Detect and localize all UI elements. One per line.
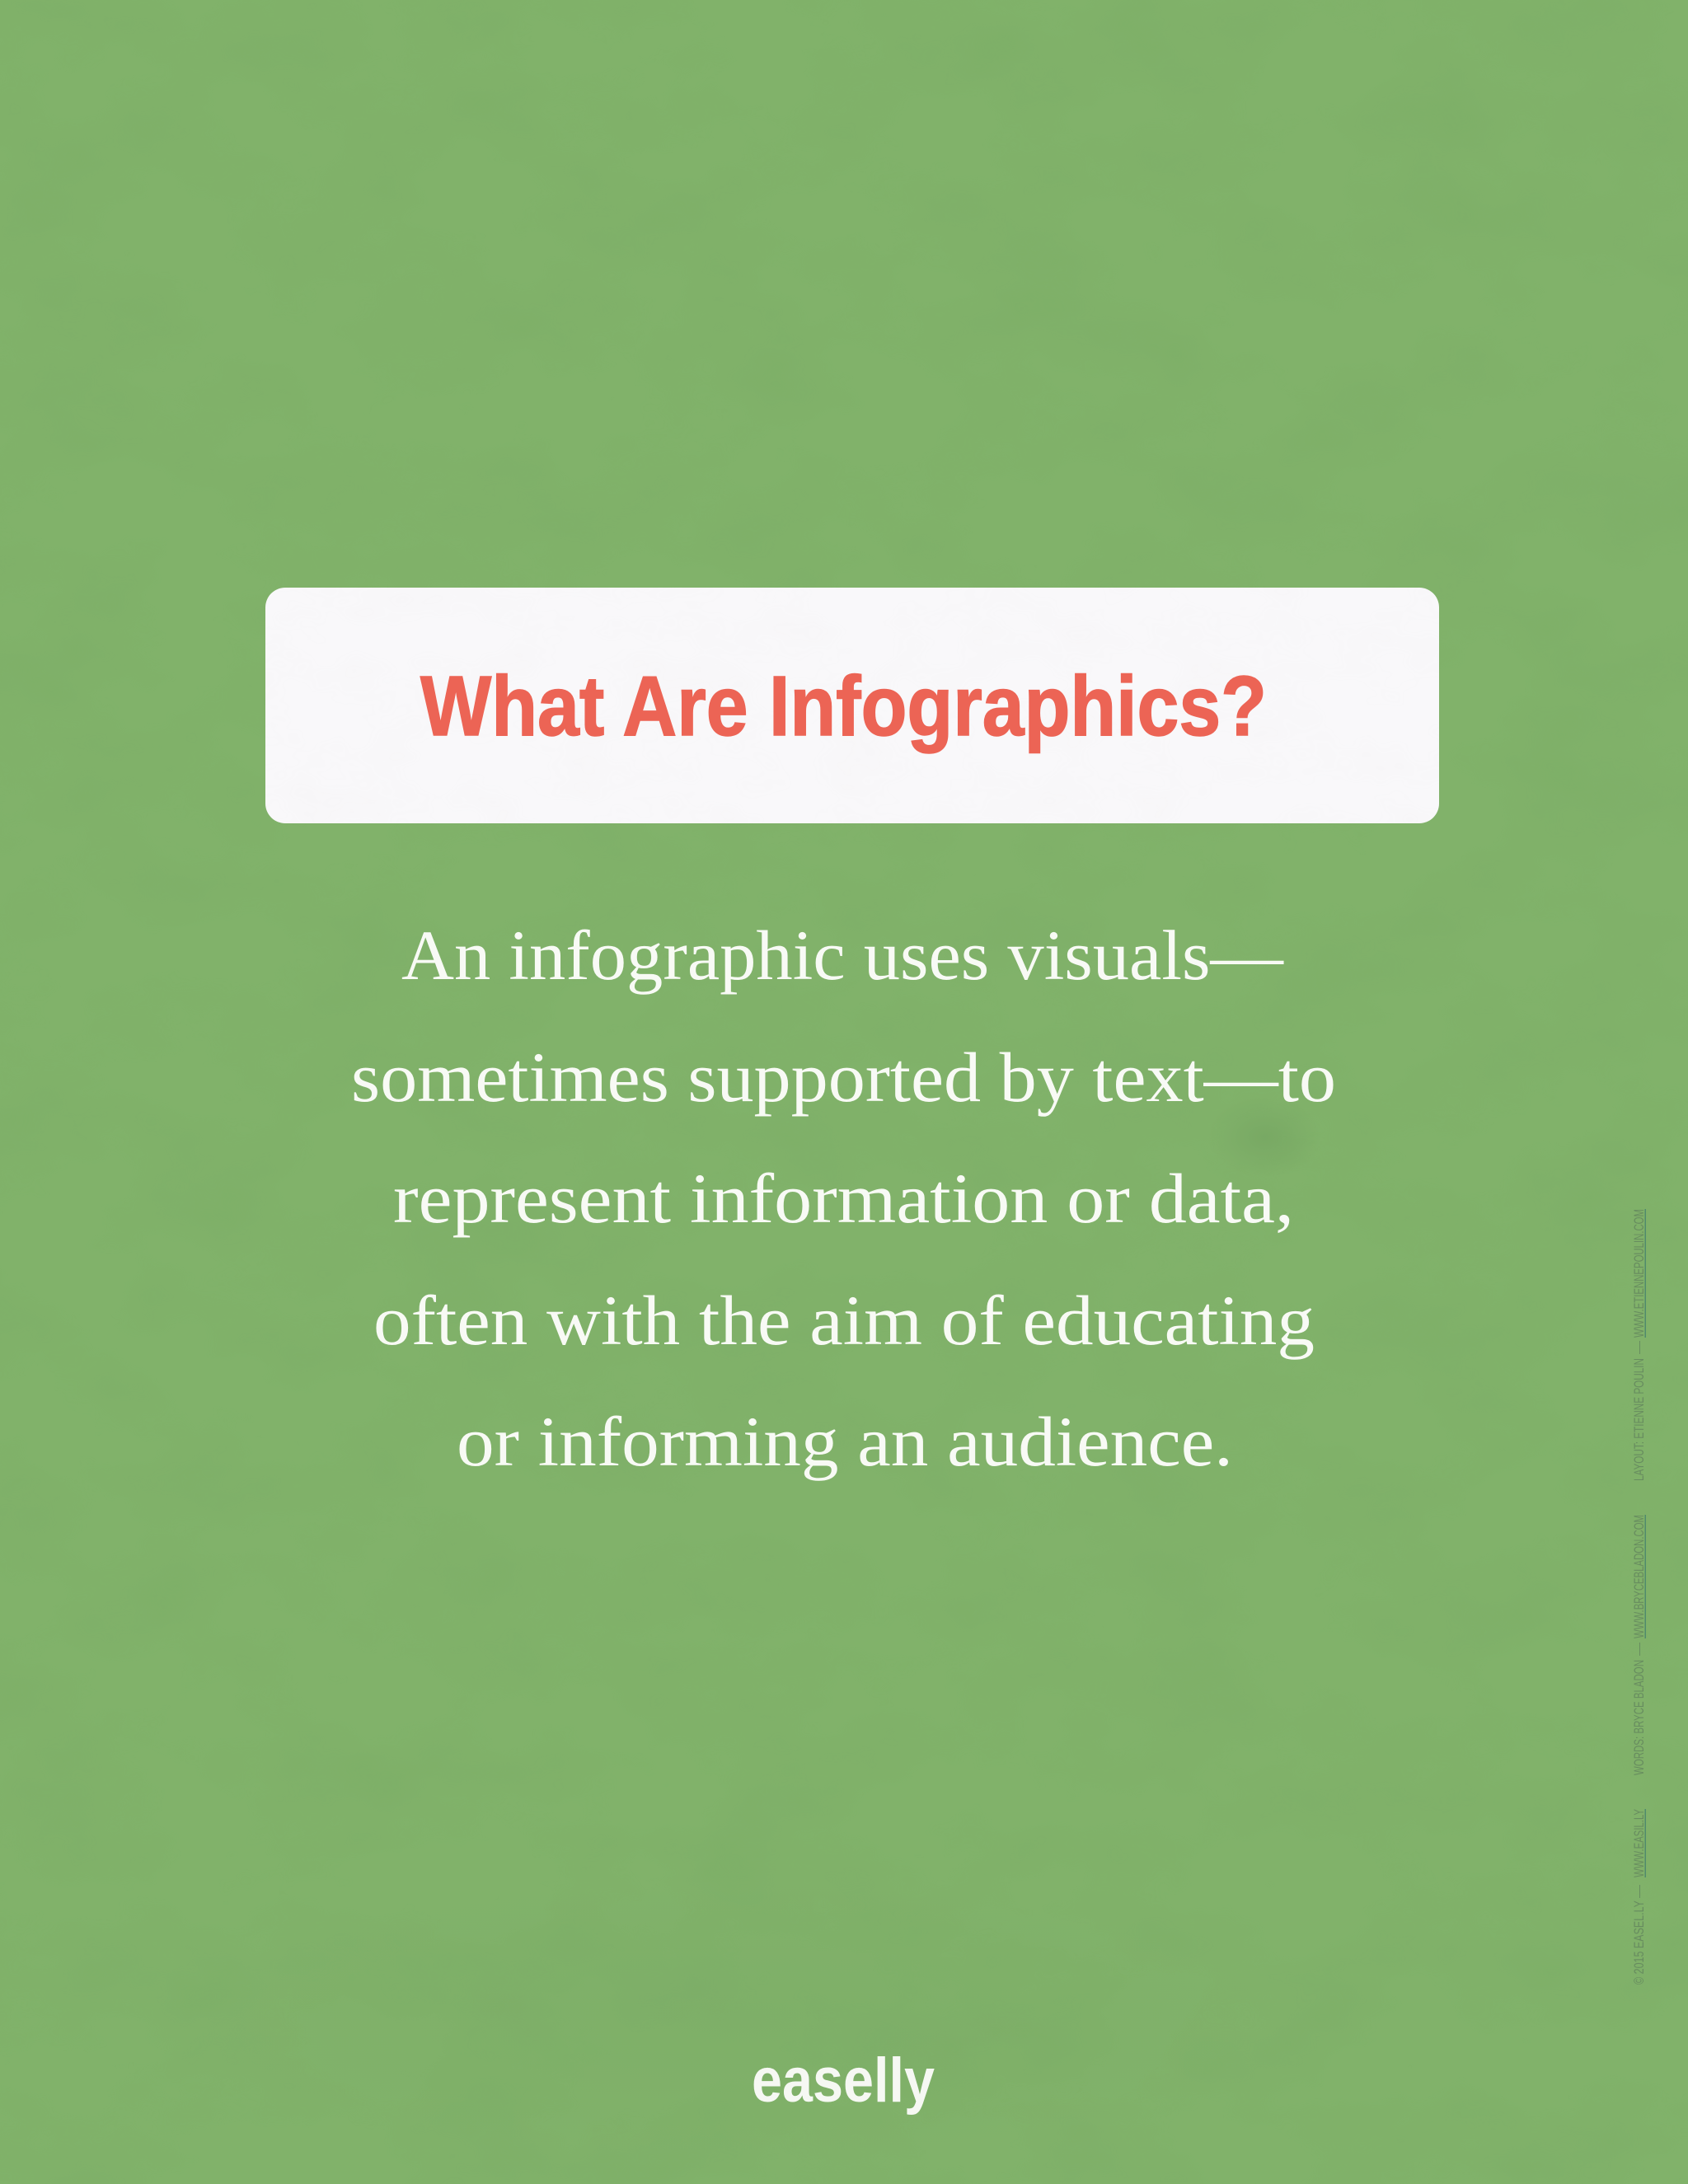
- panel: title card: [265, 588, 1439, 823]
- text block: definition of an infographic: sometimes supported by text—to: [351, 1038, 1336, 1117]
- text block: definition of an infographic: represent information or data,: [393, 1159, 1294, 1238]
- credits: vertical copyright and attribution line: [1631, 1209, 1647, 1985]
- text block: definition of an infographic: often with the aim of educating: [373, 1281, 1315, 1360]
- credits: vertical copyright and attribution line: © 2015 EASEL.LY: [1631, 1900, 1647, 1985]
- text block: definition of an infographic: An infographic uses visuals—: [401, 916, 1284, 995]
- infographic canvas: [265, 588, 1646, 2115]
- credits: vertical copyright and attribution line: WWW.BRYCEBLADON.COM: [1631, 1515, 1647, 1638]
- text block: definition of an infographic: or informing an audience.: [457, 1402, 1233, 1481]
- text block: definition of an infographic: [351, 916, 1336, 1481]
- credits: vertical copyright and attribution line: WWW.EASIL.LY: [1631, 1809, 1647, 1877]
- heading: What Are Infographics?: [420, 658, 1267, 753]
- credits: vertical copyright and attribution line: LAYOUT: ETIENNE POULIN: [1631, 1358, 1647, 1481]
- logo: easelly wordmark: easelly: [752, 2046, 935, 2116]
- credits: vertical copyright and attribution line: WORDS: BRYCE BLADON: [1631, 1660, 1647, 1775]
- credits: vertical copyright and attribution line: WWW.ETIENNEPOULIN.COM: [1631, 1209, 1647, 1338]
